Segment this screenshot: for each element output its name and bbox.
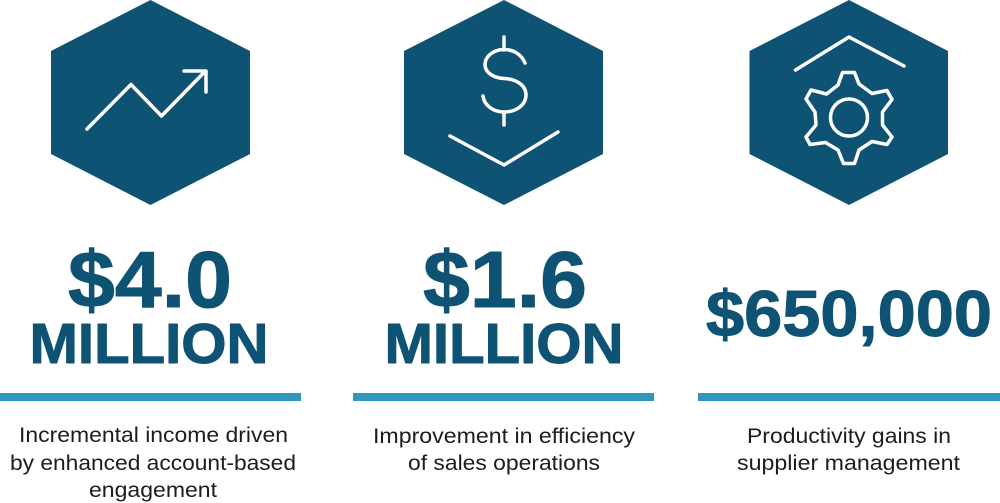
stat: $4.0 million [30,235,268,376]
description: of sales operations [408,451,600,475]
divider bar [0,393,301,401]
stat: $4.0 million: $4.0 [68,235,232,324]
panel: sales efficiency [353,0,654,475]
icon: hexagon with rising arrow [51,0,250,205]
stat: $4.0 million: MILLION [30,312,268,376]
panel: supplier productivity [698,0,1000,475]
icon: hexagon with dollar and down chevron [404,0,603,205]
divider bar [353,393,654,401]
stat: $1.6 million: MILLION [384,312,624,376]
description: engagement [89,478,217,502]
icon: hexagon with roof and gear [750,0,948,205]
stat: $1.6 million [384,235,624,376]
description [10,423,296,502]
description: by enhanced account-based [10,451,296,475]
description: Improvement in efficiency [373,424,635,448]
divider bar [698,393,1000,401]
stat: $1.6 million: $1.6 [423,235,587,324]
description: supplier management [737,451,960,475]
description [737,424,960,475]
stat: $650,000: $650,000 [706,277,992,350]
panel: incremental income [0,0,301,502]
description [373,424,635,475]
description: Productivity gains in [747,424,951,448]
description: Incremental income driven [19,423,288,447]
